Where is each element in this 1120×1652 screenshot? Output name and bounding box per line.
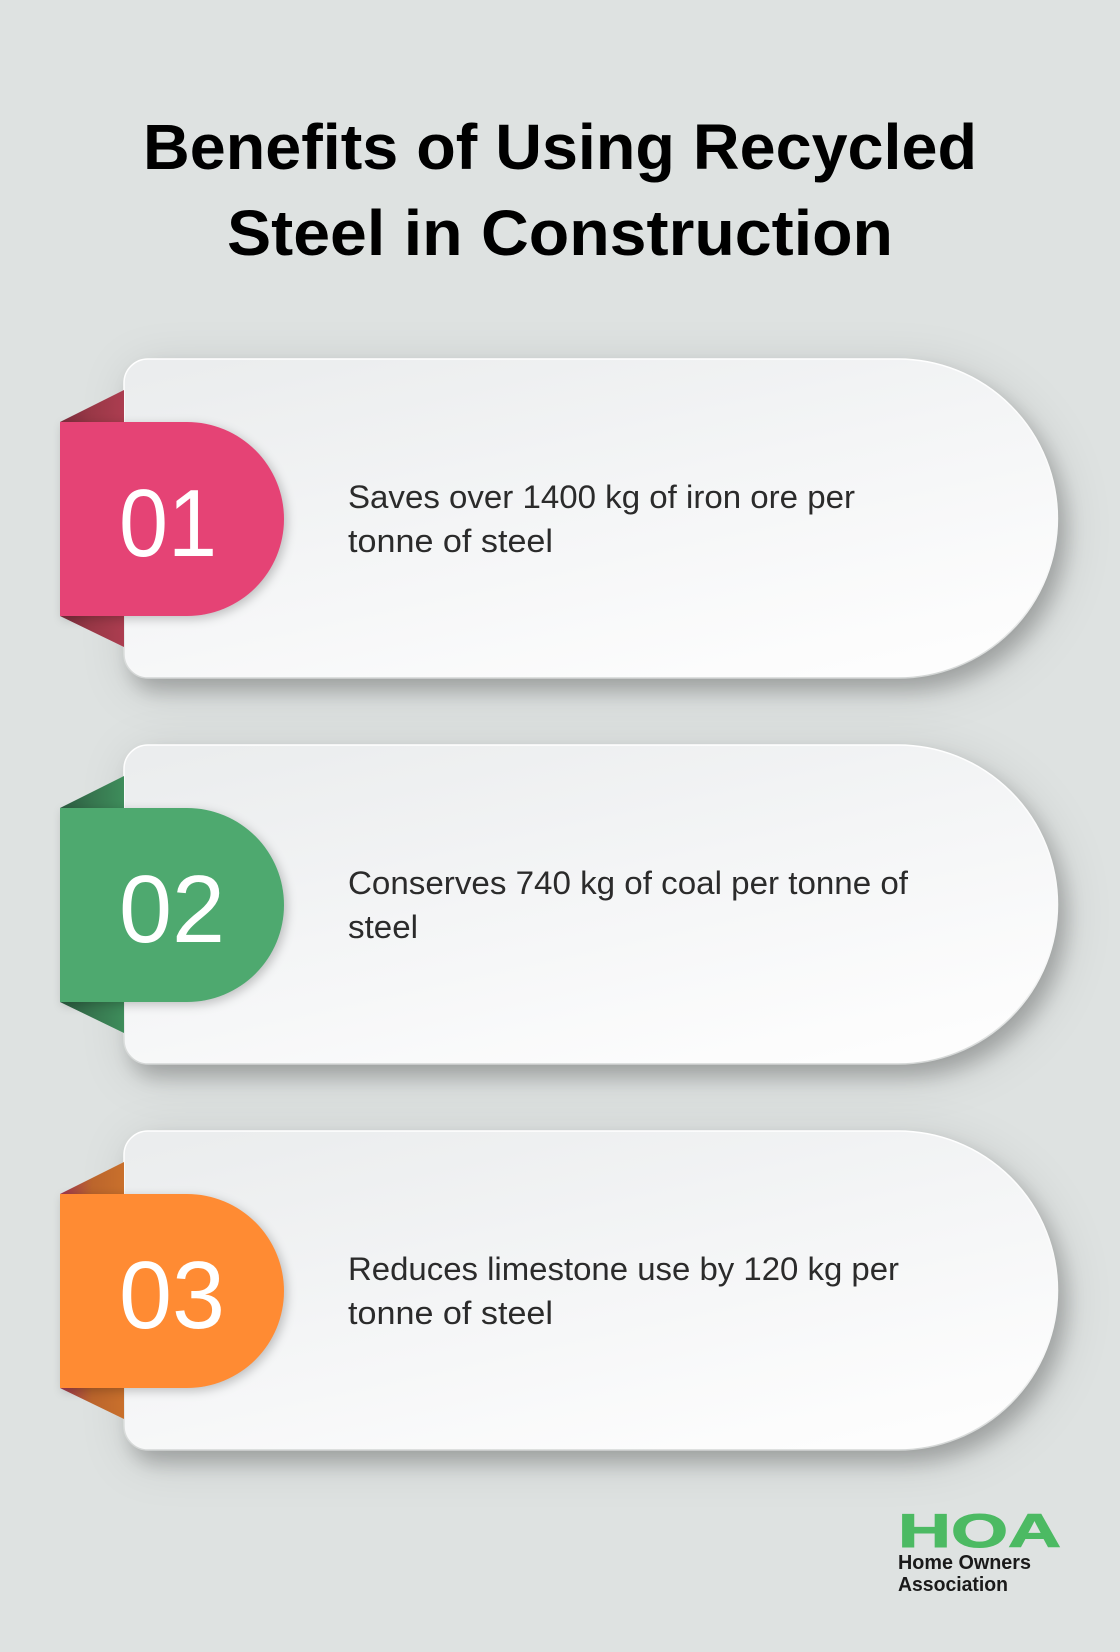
logo mark: HOA xyxy=(898,1504,1061,1557)
number: 02 xyxy=(119,856,225,963)
logo: HOA xyxy=(898,1504,1061,1596)
logo text xyxy=(898,1552,1031,1596)
card background xyxy=(124,359,1057,678)
card background xyxy=(124,745,1058,1064)
description xyxy=(348,479,855,559)
title: Steel in Construction xyxy=(227,197,893,269)
title: Benefits of Using Recycled xyxy=(143,111,977,183)
title xyxy=(143,111,977,269)
description: steel xyxy=(348,909,418,945)
description: tonne of steel xyxy=(348,1295,553,1331)
description: Saves over 1400 kg of iron ore per xyxy=(348,479,855,515)
ribbon fold top xyxy=(60,776,124,808)
description: tonne of steel xyxy=(348,523,553,559)
description: Reduces limestone use by 120 kg per xyxy=(348,1251,899,1287)
panel: benefit 02 xyxy=(60,745,1058,1064)
ribbon fold bottom xyxy=(60,1002,124,1033)
description: Conserves 740 kg of coal per tonne of xyxy=(348,865,908,901)
description xyxy=(348,865,908,945)
number: 01 xyxy=(119,470,217,577)
panel: benefit 01 xyxy=(60,359,1057,678)
description xyxy=(348,1251,899,1331)
card background xyxy=(124,1131,1058,1450)
number tab xyxy=(60,808,284,1002)
ribbon fold top xyxy=(60,1162,124,1194)
number tab xyxy=(60,422,284,616)
ribbon fold top xyxy=(60,390,124,422)
number tab xyxy=(60,1194,284,1388)
logo text: Association xyxy=(898,1574,1008,1596)
logo text: Home Owners xyxy=(898,1552,1031,1574)
ribbon fold bottom xyxy=(60,1388,124,1419)
number: 03 xyxy=(119,1242,225,1349)
panel: benefit 03 xyxy=(60,1131,1058,1450)
ribbon fold bottom xyxy=(60,616,124,647)
